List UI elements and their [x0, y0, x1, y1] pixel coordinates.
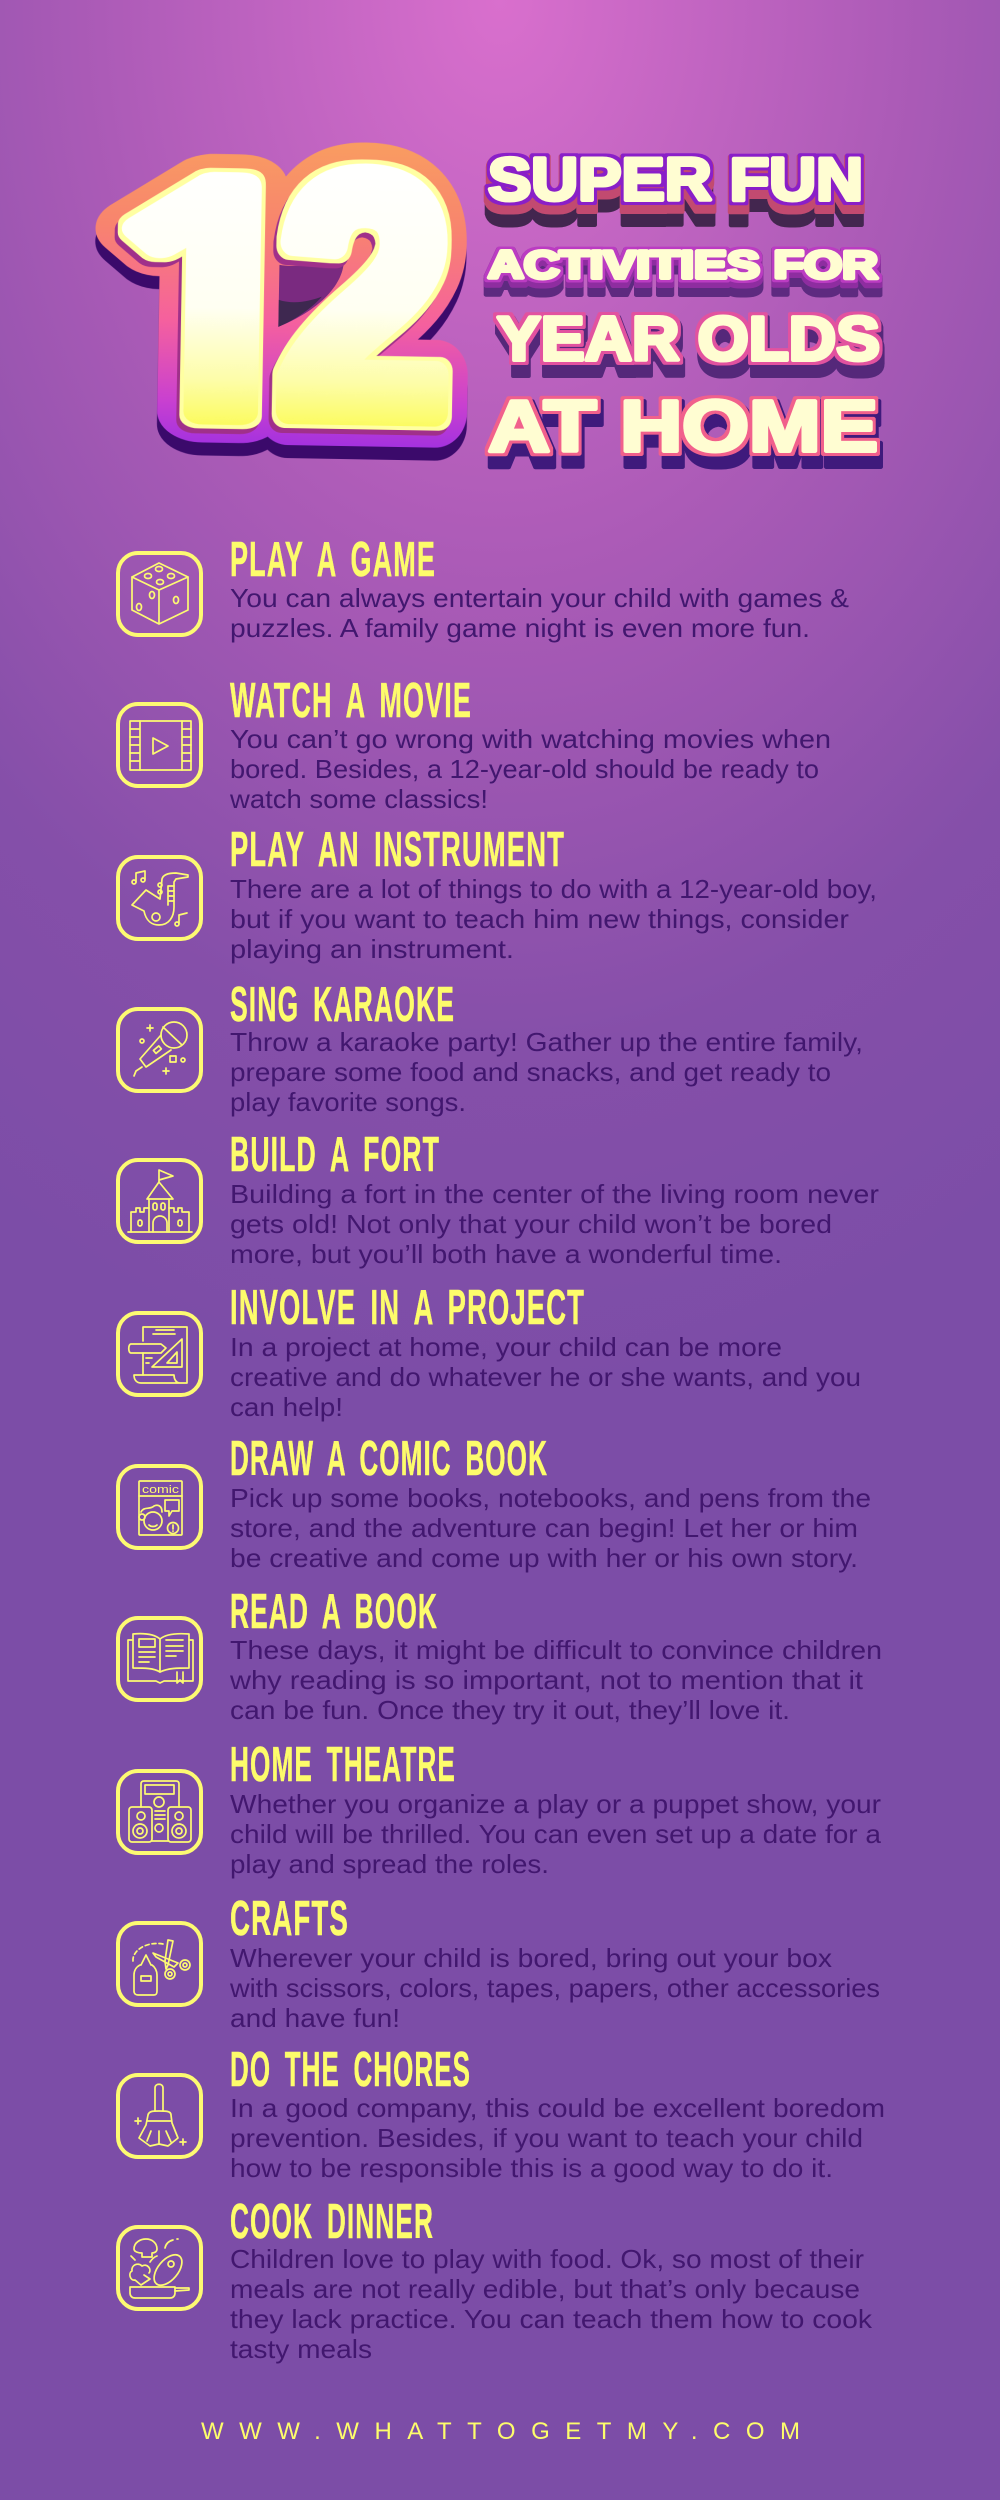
heading: HOME THEATRE: [230, 1738, 456, 1792]
icon: comic book: [118, 1466, 201, 1548]
activity: Cook dinner: [118, 2195, 873, 2364]
description: why reading is so important, not to mention that it: [229, 1665, 864, 1695]
activity: Build a fort: [118, 1128, 879, 1269]
icon: blueprint and ruler: [118, 1313, 201, 1395]
activity: Read a book: [118, 1585, 882, 1725]
description: In a good company, this could be excellent boredom: [230, 2093, 885, 2123]
activity: Sing karaoke: [118, 978, 863, 1117]
description: [230, 1483, 871, 1573]
activity: Crafts: [118, 1892, 880, 2033]
description: Pick up some books, notebooks, and pens from the: [230, 1483, 871, 1513]
number outer glow outline: 2: [277, 107, 453, 484]
description: Whether you organize a play or a puppet show, your: [230, 1789, 881, 1819]
description: prevention. Besides, if you want to teach your child: [230, 2123, 863, 2153]
description: playing an instrument.: [230, 934, 514, 964]
description: There are a lot of things to do with a 12-year-old boy,: [230, 874, 877, 904]
number outer glow outline: [73, 103, 453, 484]
description: creative and do whatever he or she wants, and you: [230, 1362, 861, 1392]
heading: SING KARAOKE: [230, 978, 455, 1032]
description: child will be thrilled. You can even set up a date for a: [230, 1819, 882, 1849]
description: gets old! Not only that your child won’t be bored: [230, 1209, 832, 1239]
big number 12: [73, 103, 453, 484]
description: bored. Besides, a 12-year-old should be ready to: [230, 754, 819, 784]
description: [230, 1179, 879, 1269]
icon: microphone: [118, 1009, 201, 1091]
heading: READ A BOOK: [230, 1585, 438, 1639]
icon: glue and scissors: [118, 1923, 201, 2005]
activity: Do the chores: [118, 2043, 885, 2183]
description: Building a fort in the center of the living room never: [230, 1179, 879, 1209]
title line: Activities for: ACTIVITIES FOR: [488, 244, 878, 287]
description: In a project at home, your child can be more: [230, 1332, 782, 1362]
description: prepare some food and snacks, and get ready to: [230, 1057, 831, 1087]
heading: DRAW A COMIC BOOK: [230, 1432, 548, 1486]
description: tasty meals: [230, 2334, 372, 2364]
description: [229, 724, 831, 814]
icon: stereo system: [118, 1771, 201, 1853]
description: [230, 2244, 873, 2364]
description: [230, 2093, 885, 2183]
description: meals are not really edible, but that’s only because: [230, 2274, 860, 2304]
description: watch some classics!: [229, 784, 488, 814]
comic label: comic: [142, 1484, 180, 1496]
description: Wherever your child is bored, bring out your box: [230, 1943, 832, 1973]
description: be creative and come up with her or his own story.: [230, 1543, 858, 1573]
number face: [73, 103, 453, 484]
activity: Draw a comic book: [118, 1432, 871, 1573]
description: they lack practice. You can teach them how to cook: [230, 2304, 873, 2334]
description: can be fun. Once they try it out, they’ll love it.: [230, 1695, 790, 1725]
heading: COOK DINNER: [230, 2195, 434, 2249]
description: play favorite songs.: [230, 1087, 466, 1117]
heading: BUILD A FORT: [230, 1128, 440, 1182]
title line: At Home: AT HOME: [488, 387, 878, 467]
icon: pan with food: [118, 2227, 201, 2309]
number face: 2: [277, 107, 453, 484]
title block: [73, 103, 880, 484]
description: [230, 1332, 861, 1422]
heading: DO THE CHORES: [230, 2043, 471, 2097]
description: [230, 874, 877, 964]
title line: Year Olds: YEAR OLDS: [497, 305, 880, 374]
footer website: WWW.WHATTOGETMY.COM: [201, 2418, 800, 2445]
icon: castle: [118, 1160, 201, 1242]
description: and have fun!: [230, 2003, 400, 2033]
title line: Super Fun: SUPER FUN: [488, 146, 863, 213]
icon: broom: [118, 2075, 201, 2157]
heading: CRAFTS: [230, 1892, 349, 1946]
description: [230, 1789, 882, 1879]
activity: Home theatre: [118, 1738, 882, 1879]
description: store, and the adventure can begin! Let her or him: [230, 1513, 858, 1543]
description: [229, 1943, 880, 2033]
description: Children love to play with food. Ok, so most of their: [230, 2244, 864, 2274]
heading: INVOLVE IN A PROJECT: [230, 1281, 585, 1335]
description: more, but you’ll both have a wonderful time.: [230, 1239, 782, 1269]
number face: 1: [73, 153, 352, 463]
description: play and spread the roles.: [230, 1849, 549, 1879]
icon: film strip: [118, 704, 201, 786]
activity: Play a game: [118, 533, 849, 643]
counter of the 2: [278, 255, 344, 328]
heading: WATCH A MOVIE: [230, 674, 472, 728]
number outer glow outline: 1: [73, 153, 352, 463]
activity: Watch a movie: [118, 674, 831, 814]
icon: open book: [118, 1618, 201, 1700]
description: [229, 1635, 882, 1725]
activity: Involve in a project: [118, 1281, 861, 1422]
icon: saxophone: [118, 857, 201, 939]
heading: PLAY AN INSTRUMENT: [230, 823, 565, 877]
description: [230, 1027, 863, 1117]
icon: dice: [118, 553, 201, 635]
heading: PLAY A GAME: [230, 533, 436, 587]
description: You can’t go wrong with watching movies when: [230, 724, 831, 754]
description: You can always entertain your child with games &: [230, 583, 849, 613]
description: puzzles. A family game night is even more fun.: [230, 613, 810, 643]
description: These days, it might be difficult to convince children: [230, 1635, 882, 1665]
description: Throw a karaoke party! Gather up the entire family,: [230, 1027, 863, 1057]
description: how to be responsible this is a good way to do it.: [230, 2153, 833, 2183]
description: with scissors, colors, tapes, papers, other accessories: [229, 1973, 880, 2003]
description: can help!: [230, 1392, 343, 1422]
description: [230, 583, 849, 643]
activity: Play an instrument: [118, 823, 877, 964]
description: but if you want to teach him new things, consider: [230, 904, 849, 934]
